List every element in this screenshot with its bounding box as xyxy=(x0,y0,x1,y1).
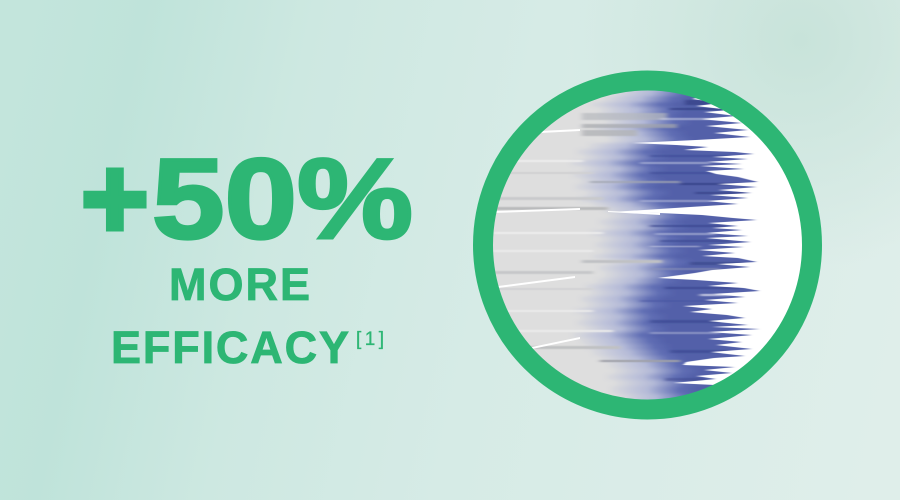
label: MORE: MORE xyxy=(169,259,310,310)
headline: +50%: 50% xyxy=(152,136,413,263)
bristle streaks xyxy=(493,100,745,381)
icon: toothbrush bristles in circular lens xyxy=(493,90,802,400)
label: EFFICACY with reference: [1] xyxy=(356,329,384,350)
green circular ring xyxy=(483,80,812,410)
label: EFFICACY with reference: EFFICACY xyxy=(111,322,349,373)
headline: +50% xyxy=(81,133,413,263)
white gaps between tufts xyxy=(493,129,660,349)
headline: +50%: + xyxy=(81,133,149,263)
bristles with blue tips xyxy=(493,90,761,400)
